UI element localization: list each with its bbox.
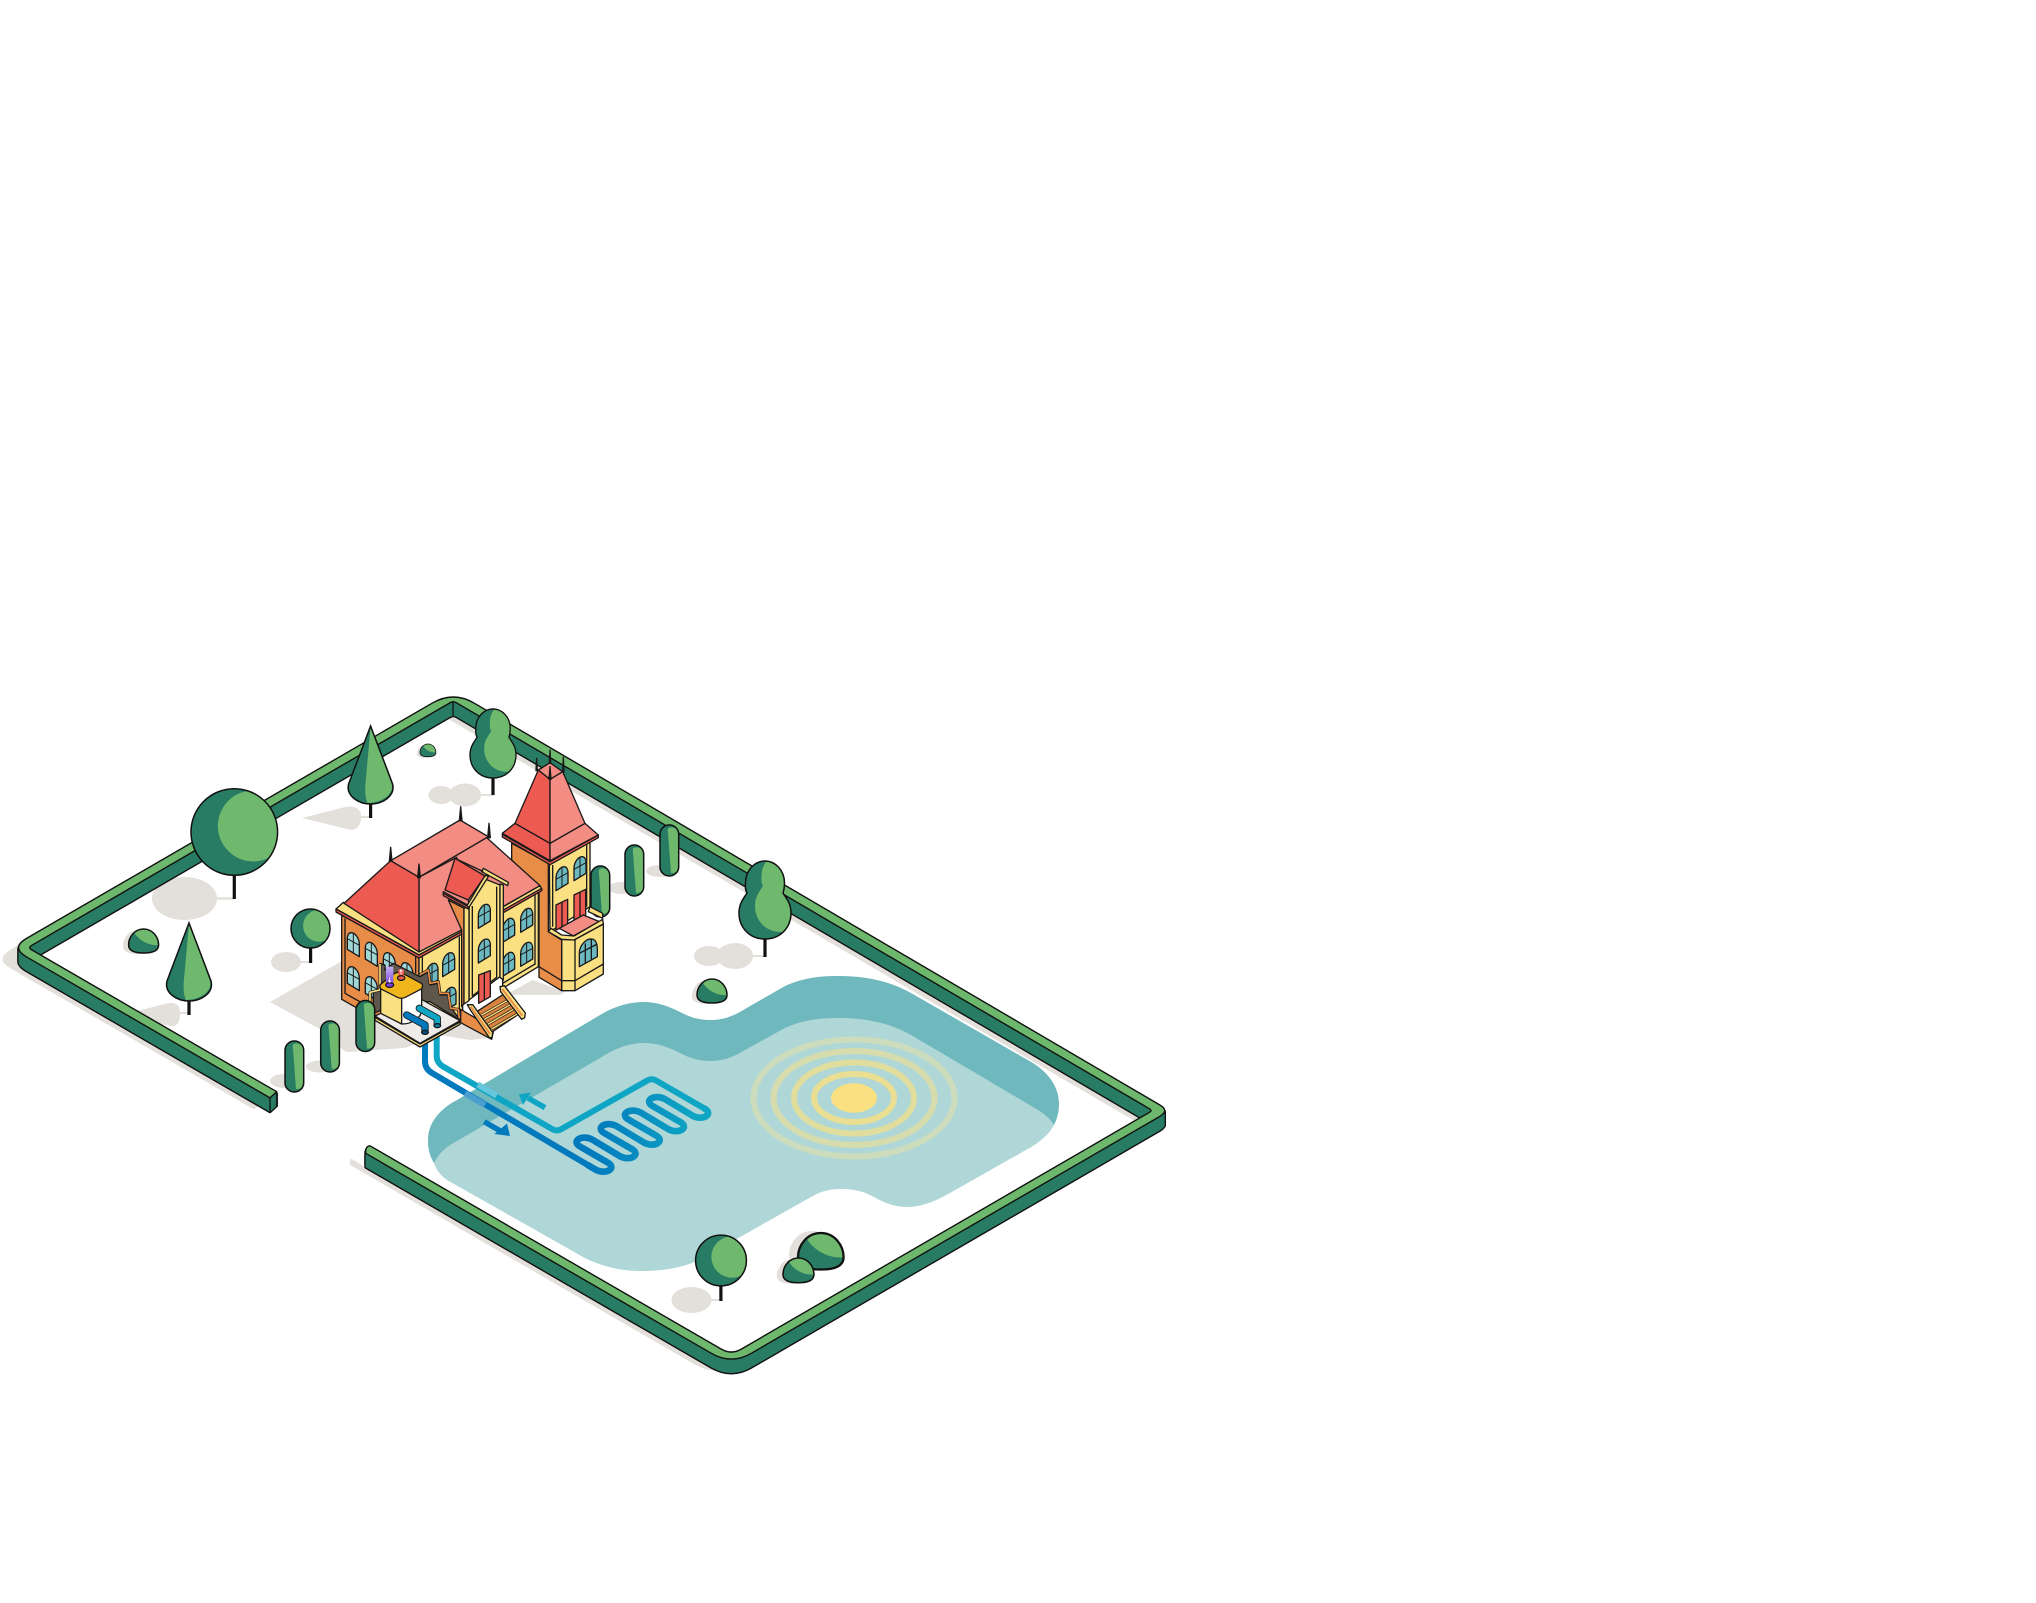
gable yellow front xyxy=(469,878,500,1000)
gable roof xyxy=(445,858,485,900)
bush: large bottom xyxy=(798,1233,844,1269)
main roof spikes xyxy=(389,807,490,878)
tower roof xyxy=(502,763,598,865)
tree: top double lobe xyxy=(470,703,530,795)
stair right stringer xyxy=(500,986,525,1019)
shadow: bottom round tree xyxy=(672,1287,721,1313)
fence top surface xyxy=(19,697,1165,1359)
orange wall windows xyxy=(347,933,413,1001)
tower yellow front xyxy=(549,841,590,932)
shadow: top cone tree xyxy=(302,806,371,830)
pipe: outgoing blue line xyxy=(425,1040,595,1170)
heat pump unit xyxy=(380,967,423,1024)
pipes: ground loop xyxy=(425,1030,708,1172)
left wing orange wall xyxy=(342,915,419,1043)
shadow: right double tree xyxy=(694,943,765,969)
right wing windows xyxy=(503,908,533,976)
hedge: upper row two xyxy=(625,845,644,896)
shadow: upper hedge one xyxy=(608,882,636,894)
tree: top cone xyxy=(348,726,393,818)
pipe: serpentine coil xyxy=(577,1097,708,1172)
tree: bottom round xyxy=(696,1235,753,1301)
hedge: front row two xyxy=(321,1021,339,1072)
stair left stringer xyxy=(467,1005,493,1038)
fence ground shadow xyxy=(3,703,1157,1371)
fence wall xyxy=(19,699,1165,1373)
gable ridge eave xyxy=(482,868,508,886)
shadow: upper hedge two xyxy=(646,865,674,877)
pond: water surface xyxy=(434,1018,1054,1271)
pond: deep bank xyxy=(428,976,1059,1163)
bush: by the pond xyxy=(697,979,727,1003)
entrance stairs xyxy=(461,986,525,1039)
shadow: left cone tree xyxy=(137,1003,189,1026)
floor pipes xyxy=(407,1008,441,1034)
balcony rail front xyxy=(548,919,603,940)
tree: left cone xyxy=(167,923,211,1015)
hedge: front row three xyxy=(356,1000,375,1052)
cutaway floor xyxy=(375,997,460,1043)
gable eave xyxy=(443,875,488,908)
bush: tiny top xyxy=(420,744,436,757)
ground shadows of trees, hedges and house xyxy=(123,745,835,1313)
right wing xyxy=(503,885,538,988)
tree: big round xyxy=(191,789,289,899)
tower spikes xyxy=(536,750,564,779)
shadow: bush small xyxy=(777,1259,808,1284)
balcony rail back xyxy=(588,907,603,918)
shadow: small round tree xyxy=(271,952,310,972)
red pipe xyxy=(397,969,405,980)
fence xyxy=(19,697,1165,1373)
arrow: return flow xyxy=(519,1092,545,1108)
shadow: house xyxy=(270,961,490,1052)
eaves of main roof xyxy=(336,902,463,958)
front yellow wall xyxy=(416,933,463,1045)
right wing eave xyxy=(503,886,542,911)
arrow: outgoing flow xyxy=(484,1122,510,1136)
stair steps xyxy=(477,993,520,1033)
bush: small bottom xyxy=(783,1258,814,1283)
bush: left xyxy=(129,929,159,953)
sun reflection ripples xyxy=(754,1040,954,1156)
shadow: bush large xyxy=(789,1231,835,1267)
shadow: bush tiny xyxy=(417,745,433,758)
pipe: teal section under the bank xyxy=(478,1084,497,1096)
pipe: blue section under the bank xyxy=(465,1093,485,1105)
tree: right double lobe xyxy=(739,854,807,957)
purple pipe xyxy=(386,967,394,987)
shadow: big tree xyxy=(152,877,234,920)
front door xyxy=(479,971,490,1003)
hedge: behind tower xyxy=(591,866,610,917)
tree: small round left xyxy=(291,909,335,963)
cutaway back walls xyxy=(373,963,460,1020)
hedge: front row one xyxy=(285,1041,304,1092)
balcony floor xyxy=(559,915,599,936)
gable pilasters xyxy=(464,906,469,1004)
cut edge right xyxy=(420,970,459,1018)
front wall windows xyxy=(426,953,456,1011)
main roof front xyxy=(344,857,470,952)
gable windows xyxy=(478,904,490,963)
cut edge left xyxy=(370,964,380,1013)
hedge: upper row three xyxy=(660,825,679,876)
illustration: isometric garden with house and pond xyxy=(2,696,1166,1374)
tower doors xyxy=(556,889,586,930)
front gable bay xyxy=(443,858,508,1007)
shadow: top double tree xyxy=(428,784,493,806)
fence corner and end edges xyxy=(270,701,453,1112)
shadow: tower side xyxy=(505,980,565,995)
shadow: bush right xyxy=(692,980,722,1004)
pipe: return teal line xyxy=(437,1030,704,1130)
stair base xyxy=(461,1009,493,1039)
right wing wall xyxy=(503,885,538,988)
tower orange side xyxy=(512,843,562,991)
bay wall xyxy=(562,924,603,991)
house xyxy=(336,750,603,1047)
main roof back slopes xyxy=(391,820,542,913)
tower xyxy=(502,750,603,991)
shadow: front hedge two xyxy=(306,1060,334,1072)
bay window xyxy=(579,939,597,967)
gable orange side xyxy=(448,900,464,1007)
shadow: bush left xyxy=(123,930,153,954)
cutaway room xyxy=(370,963,460,1047)
floor edge xyxy=(375,1017,460,1047)
tower windows xyxy=(556,857,586,891)
shadow: front hedge one xyxy=(270,1074,300,1088)
